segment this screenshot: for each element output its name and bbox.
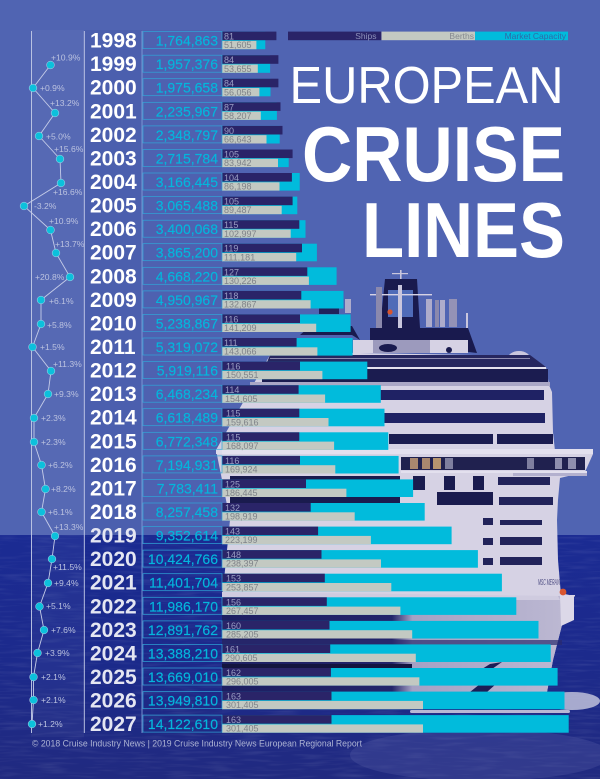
cruise ship photo: MSC MERAVI xyxy=(538,578,560,587)
row 2017: 2017 xyxy=(90,477,137,500)
data rows xyxy=(90,30,569,736)
row 2011: 111 xyxy=(224,338,238,348)
row 2023 xyxy=(90,619,538,642)
row 2021: 253,857 xyxy=(226,582,259,592)
row 2005: 2005 xyxy=(90,195,137,218)
row 2006: 3,400,068 xyxy=(156,221,218,237)
column shading xyxy=(31,30,222,737)
row 2010 xyxy=(90,312,351,335)
row 1998 xyxy=(90,30,276,53)
row 2022 xyxy=(90,595,516,618)
row 2012: 5,919,116 xyxy=(157,363,218,379)
row 2016: 2016 xyxy=(90,454,137,477)
row 1999: 84 xyxy=(224,55,234,65)
row 2003: 83,942 xyxy=(224,158,252,168)
row 2020: 10,424,766 xyxy=(148,551,218,567)
row 2027: 163 xyxy=(226,715,241,725)
row 2024 xyxy=(90,642,551,665)
row 2019: 143 xyxy=(225,527,240,537)
row 2008: 4,668,220 xyxy=(156,268,218,284)
line chart: annual growth: +2.3% xyxy=(41,437,66,447)
row 2007: 2007 xyxy=(90,242,137,265)
row 2013 xyxy=(90,383,381,406)
row 1998: 81 xyxy=(224,32,234,42)
row 2025: 296,005 xyxy=(226,677,259,687)
row 2017 xyxy=(90,477,413,500)
line chart: annual growth: +2.3% xyxy=(41,413,66,423)
row 2026: 13,949,810 xyxy=(148,693,218,709)
row 2006: 115 xyxy=(224,220,238,230)
row 2014: 6,618,489 xyxy=(156,410,218,426)
row 2012: 150,551 xyxy=(226,370,259,380)
title: LINES xyxy=(362,186,565,274)
row 2006: 2006 xyxy=(90,218,137,241)
row 2008: 127 xyxy=(224,267,239,277)
line chart: annual growth: +13.2% xyxy=(50,98,80,108)
row 2012 xyxy=(90,360,367,383)
row 2024: 290,605 xyxy=(225,653,258,663)
row 2022: 267,457 xyxy=(226,606,259,616)
legend: Market Capacity xyxy=(505,31,567,41)
row 2023: 160 xyxy=(226,621,241,631)
row 2027 xyxy=(90,713,569,736)
row 1998: 1998 xyxy=(90,30,137,53)
row 2018: 8,257,458 xyxy=(156,504,218,520)
row 2014: 159,616 xyxy=(226,417,259,427)
row 2007: 119 xyxy=(224,244,238,254)
line chart: annual growth: +16.6% xyxy=(53,187,83,197)
row 2001: 58,207 xyxy=(224,111,252,121)
row 2024: 2024 xyxy=(90,642,137,665)
line chart: annual growth: +10.9% xyxy=(49,216,79,226)
row 2005: 105 xyxy=(224,197,239,207)
background: sea xyxy=(0,535,600,779)
row 2012: 2012 xyxy=(90,360,137,383)
cruise ship photo xyxy=(216,270,600,713)
legend: Ships xyxy=(355,31,376,41)
title: CRUISE xyxy=(302,110,565,198)
legend: Berths xyxy=(449,31,474,41)
row 2010: 5,238,867 xyxy=(156,315,218,331)
row 1999 xyxy=(90,53,278,76)
row 1999: 53,655 xyxy=(224,64,252,74)
row 2018: 132 xyxy=(225,503,240,513)
footer credit: © 2018 Cruise Industry News | 2019 Cruise Industry News European Regional Report xyxy=(32,738,362,748)
row 2011: 5,319,072 xyxy=(156,339,218,355)
row 2007 xyxy=(90,242,317,265)
line chart: annual growth: +5.8% xyxy=(47,320,72,330)
row 2004: 2004 xyxy=(90,171,137,194)
row 2014: 2014 xyxy=(90,407,137,430)
row 2023: 2023 xyxy=(90,619,137,642)
row 2016: 7,194,931 xyxy=(156,457,218,473)
row 2010: 2010 xyxy=(90,312,137,335)
row 2018: 198,919 xyxy=(225,512,258,522)
row 2001: 2001 xyxy=(90,100,137,123)
row 2016 xyxy=(90,454,399,477)
row 2019: 9,352,614 xyxy=(156,528,218,544)
line chart: annual growth: -3.2% xyxy=(34,201,57,211)
row 2000: 56,056 xyxy=(224,87,252,97)
line chart: annual growth: +7.6% xyxy=(51,625,76,635)
line chart: annual growth: +20.8% xyxy=(35,272,65,282)
row 2014 xyxy=(90,407,384,430)
row 2021: 2021 xyxy=(90,572,137,595)
row 1999: 1999 xyxy=(90,53,137,76)
line chart: annual growth: +6.2% xyxy=(48,460,73,470)
row 2013: 6,468,234 xyxy=(156,386,218,402)
row 2002: 90 xyxy=(224,126,234,136)
row 2006: 102,997 xyxy=(224,229,257,239)
row 2004 xyxy=(90,171,300,194)
row 1998: 51,605 xyxy=(224,40,252,50)
row 2019: 2019 xyxy=(90,525,137,548)
row 2027: 14,122,610 xyxy=(148,716,218,732)
row 2014: 115 xyxy=(226,409,240,419)
line chart: annual growth: +6.1% xyxy=(48,507,73,517)
row 2003 xyxy=(90,148,293,170)
row 2002: 66,643 xyxy=(224,135,252,145)
row 2026 xyxy=(90,690,564,713)
row 2005: 89,487 xyxy=(224,205,252,215)
row 2024: 161 xyxy=(225,644,240,654)
row 2000 xyxy=(90,77,278,100)
row 2022: 11,986,170 xyxy=(149,598,218,614)
row 2009: 118 xyxy=(224,291,238,301)
row 2015: 168,097 xyxy=(226,441,259,451)
line chart: annual growth: +10.9% xyxy=(51,52,81,62)
row 2013: 154,605 xyxy=(225,394,258,404)
row 2017: 186,445 xyxy=(225,488,258,498)
row 2026: 301,405 xyxy=(226,700,259,710)
row 2002: 2,348,797 xyxy=(156,127,218,143)
row 2008: 2008 xyxy=(90,265,137,288)
row 2021 xyxy=(90,572,502,595)
row 2020 xyxy=(90,548,478,571)
line chart: annual growth: +5.0% xyxy=(46,132,71,142)
row 2006 xyxy=(90,218,306,241)
row 2023: 285,205 xyxy=(226,630,259,640)
vertical axis lines xyxy=(32,31,142,733)
row 2027: 301,405 xyxy=(226,724,259,734)
title xyxy=(290,57,565,274)
row 2018: 2018 xyxy=(90,501,137,524)
row 2003: 2003 xyxy=(90,148,137,170)
row 2016: 169,924 xyxy=(225,464,258,474)
row 2004: 86,198 xyxy=(224,182,252,192)
row 1998: 1,764,863 xyxy=(156,33,218,49)
row 2026: 163 xyxy=(226,692,241,702)
row 2011: 143,066 xyxy=(224,347,257,357)
row 2002: 2002 xyxy=(90,124,137,147)
row 2004: 3,166,445 xyxy=(156,174,218,190)
row 2023: 12,891,762 xyxy=(148,622,218,638)
row 2007: 111,181 xyxy=(224,252,255,262)
row 2010: 116 xyxy=(224,314,238,324)
row 2009 xyxy=(90,289,344,312)
line chart: annual growth: +6.1% xyxy=(49,296,74,306)
row 2001: 2,235,967 xyxy=(156,103,218,119)
line chart: annual growth: +15.6% xyxy=(54,144,84,154)
line chart: annual growth: +13.7% xyxy=(55,239,85,249)
row 2004: 104 xyxy=(224,173,239,183)
row 2022: 2022 xyxy=(90,595,137,618)
row 2012: 116 xyxy=(226,362,240,372)
row 2001 xyxy=(90,100,280,123)
row 2015: 2015 xyxy=(90,430,137,453)
row 2013: 2013 xyxy=(90,383,137,406)
row 2009: 132,867 xyxy=(224,299,257,309)
row 2018 xyxy=(90,501,425,524)
line chart: annual growth: +11.5% xyxy=(53,562,82,572)
row 2007: 3,865,200 xyxy=(156,245,218,261)
row 2024: 13,388,210 xyxy=(148,645,218,661)
row 2022: 156 xyxy=(226,597,241,607)
row 2020: 2020 xyxy=(90,548,137,571)
row 2010: 141,209 xyxy=(224,323,257,333)
line chart: annual growth: +3.9% xyxy=(45,648,70,658)
row 2000: 1,975,658 xyxy=(156,80,218,96)
line chart: annual growth: +0.9% xyxy=(40,83,65,93)
row 2002 xyxy=(90,124,282,147)
row 2003: 105 xyxy=(224,150,239,160)
row 2000: 2000 xyxy=(90,77,137,100)
row 2021: 153 xyxy=(226,574,241,584)
bow wake foam xyxy=(410,692,600,713)
row 2013: 114 xyxy=(225,385,239,395)
row 2003: 2,715,784 xyxy=(156,150,218,166)
row 2011 xyxy=(90,336,353,359)
row 2009: 4,950,967 xyxy=(156,292,218,308)
title: EUROPEAN xyxy=(290,57,564,115)
line chart: annual growth: +9.3% xyxy=(54,389,79,399)
row 2008: 130,226 xyxy=(224,276,257,286)
row 2025 xyxy=(90,666,558,689)
row 2011: 2011 xyxy=(90,336,136,359)
row 2015: 115 xyxy=(226,432,240,442)
row 2017: 7,783,411 xyxy=(157,480,218,496)
line chart: annual growth: +2.1% xyxy=(41,672,66,682)
row 2015: 6,772,348 xyxy=(156,433,218,449)
line chart: annual growth: +2.1% xyxy=(41,695,66,705)
row 2001: 87 xyxy=(224,102,234,112)
row 2000: 84 xyxy=(224,79,234,89)
line chart: annual growth xyxy=(20,52,85,729)
row 2019: 223,199 xyxy=(225,535,258,545)
row 2025: 162 xyxy=(226,668,241,678)
line chart: annual growth: +11.3% xyxy=(53,359,82,369)
line chart: annual growth: +13.3% xyxy=(54,522,84,532)
row 2025: 2025 xyxy=(90,666,137,689)
row 2005 xyxy=(90,195,297,218)
line chart: annual growth: +9.4% xyxy=(54,578,79,588)
row 2017: 125 xyxy=(225,479,240,489)
background: sky xyxy=(0,0,600,535)
row 2016: 116 xyxy=(225,456,239,466)
line chart: annual growth: +5.1% xyxy=(46,601,71,611)
row 2008 xyxy=(90,265,337,288)
row 2021: 11,401,704 xyxy=(149,575,218,591)
row 2026: 2026 xyxy=(90,690,137,713)
line chart: annual growth: +8.2% xyxy=(51,484,76,494)
row 2025: 13,669,010 xyxy=(148,669,218,685)
row 2005: 3,065,488 xyxy=(156,198,218,214)
row 2020: 148 xyxy=(226,550,241,560)
row 2020: 238,397 xyxy=(226,559,259,569)
line chart: annual growth: +1.2% xyxy=(38,719,63,729)
line chart: annual growth: +1.5% xyxy=(40,342,65,352)
row 1999: 1,957,376 xyxy=(156,56,218,72)
legend xyxy=(288,31,568,41)
row 2015 xyxy=(90,430,388,453)
row 2027: 2027 xyxy=(90,713,137,736)
row 2019 xyxy=(90,525,452,548)
row 2009: 2009 xyxy=(90,289,137,312)
